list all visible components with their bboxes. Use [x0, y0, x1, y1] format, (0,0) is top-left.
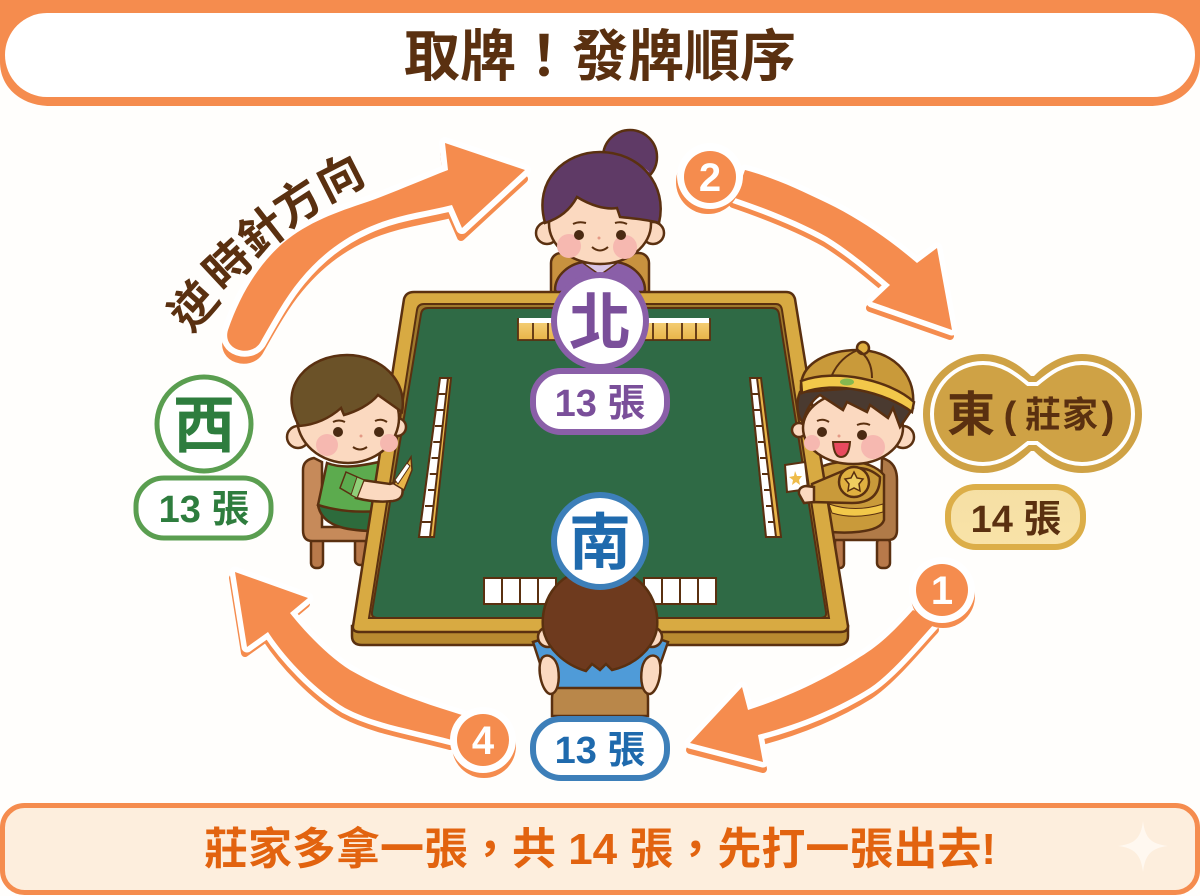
character: south player seen from behind	[533, 568, 668, 716]
count: east	[948, 487, 1083, 547]
character: east player body and chair	[815, 458, 897, 568]
label: east (dealer): 14 張	[971, 499, 1061, 541]
arrow label: counter-clockwise: 方	[265, 169, 331, 237]
title text: 取牌！發牌順序	[404, 25, 796, 88]
icon: sparkle	[1118, 821, 1168, 872]
title banner	[0, 0, 1200, 106]
arrow label: counter-clockwise: 逆	[159, 272, 229, 340]
badge number 1: 1	[931, 569, 953, 613]
arrow label: counter-clockwise	[159, 144, 372, 340]
tile row: south	[484, 578, 716, 604]
arrow: west to north (counter-clockwise direction)	[226, 143, 525, 360]
character: north player	[536, 130, 664, 305]
label: north: 13 張	[555, 383, 645, 425]
label: south	[533, 495, 667, 778]
table felt	[372, 308, 826, 618]
count: west	[136, 478, 271, 538]
arrow: east to south with badge 1	[690, 557, 975, 769]
label: east (dealer): )	[1102, 395, 1114, 437]
character: east player head, hat and arm	[785, 342, 914, 503]
label: west	[136, 377, 271, 538]
bottom callout	[2, 806, 1198, 892]
character: west player body and chair	[303, 458, 390, 568]
count: north	[533, 371, 667, 432]
label: east (dealer): 家	[1062, 394, 1098, 435]
label: east (dealer): (	[1004, 395, 1017, 437]
label: north	[533, 275, 667, 432]
arrow: north to east with badge 2	[676, 143, 952, 336]
mahjong table	[352, 292, 848, 645]
arrow: south to west with badge 4	[233, 572, 516, 778]
tile row: north	[518, 318, 710, 340]
arrow label: counter-clockwise: 時	[193, 230, 263, 300]
label: west: 13 張	[159, 489, 249, 531]
label: west: 西	[173, 392, 235, 461]
tile wall: west	[419, 378, 451, 537]
callout text: 莊家多拿一張，共 14 張，先打一張出去!	[204, 825, 996, 874]
label: north: 北	[569, 289, 631, 358]
label: south: 13 張	[555, 730, 645, 772]
badge number 2: 2	[699, 156, 721, 200]
label: east (dealer): 東	[947, 389, 995, 442]
count: south	[533, 719, 667, 778]
tile wall: east	[750, 378, 781, 537]
arrow label: counter-clockwise: 向	[308, 144, 372, 212]
label: east (dealer): 莊	[1025, 394, 1061, 435]
badge number 4: 4	[472, 719, 495, 763]
label: south: 南	[569, 509, 631, 578]
character: west player head and arm	[287, 355, 412, 502]
label: east (dealer)	[923, 354, 1142, 547]
arrow label: counter-clockwise: 針	[228, 197, 296, 267]
